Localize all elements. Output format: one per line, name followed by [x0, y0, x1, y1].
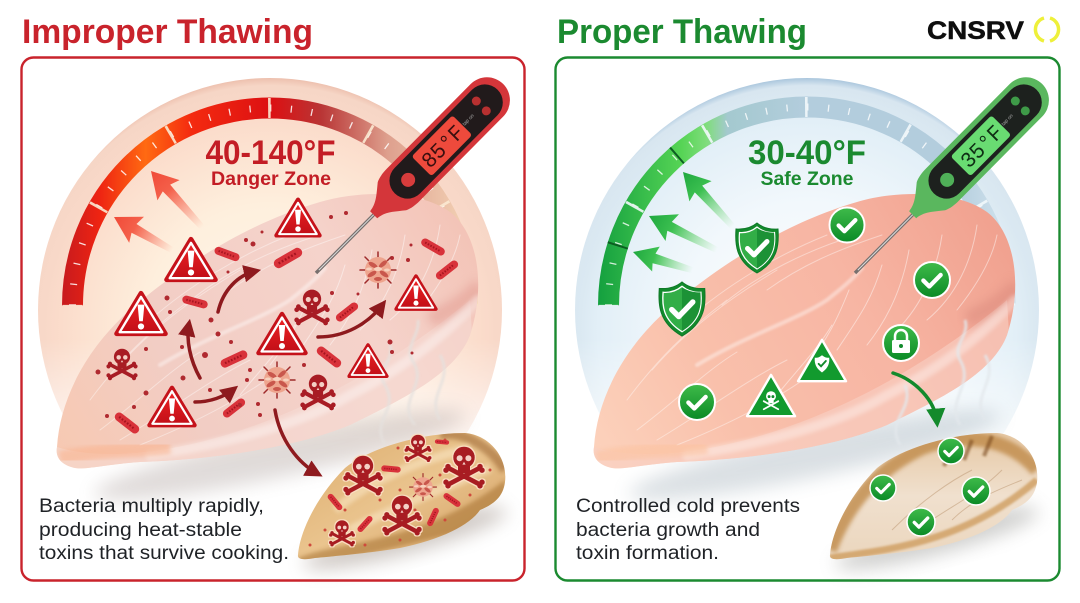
caption: bacteria [39, 496, 289, 564]
title: proper thawing: Proper Thawing [557, 13, 807, 51]
steam [896, 320, 989, 445]
gauge arc [608, 107, 1006, 306]
logo: CNSRV: CNSRV [927, 17, 1024, 45]
panel: proper thawing [556, 58, 1060, 581]
bacteria rods [113, 237, 460, 435]
steam [381, 320, 444, 445]
arrow to cooked chicken [893, 373, 937, 422]
lock badge [883, 325, 919, 361]
caption: cold prevents bacteria [576, 496, 800, 564]
spreading arrows [188, 271, 383, 474]
thermometer: 85F [300, 68, 519, 289]
shadow under raw chicken [625, 394, 1005, 516]
cluster on cooked chicken [410, 474, 436, 500]
thermometer: 35F: tap on [1001, 113, 1015, 127]
thermometer: 35F: 35°F [956, 121, 1009, 174]
subheading: safe zone: Safe Zone [760, 169, 854, 190]
raw chicken [50, 194, 480, 470]
bacteria clusters [259, 252, 396, 398]
skulls on cooked chicken [329, 435, 485, 546]
raw chicken [587, 194, 1017, 470]
thermometer: 35F [839, 68, 1058, 289]
safe arrow top [672, 162, 744, 237]
temperature dial [38, 78, 502, 440]
temperature dial [575, 78, 1039, 434]
skull icons on raw chicken [106, 290, 336, 410]
subheading: danger zone: Danger Zone [211, 169, 331, 190]
caption: bacteria: toxins that survive cooking. [39, 543, 289, 564]
danger arrow left [107, 204, 180, 263]
thermometer: 85F: tap on [462, 113, 476, 127]
gauge arc [72, 108, 468, 305]
caption: cold prevents bacteria: Controlled cold prevents [576, 496, 800, 517]
check badges [679, 208, 950, 420]
bacteria specks [96, 211, 414, 418]
caption: cold prevents bacteria: toxin formation. [576, 543, 719, 564]
shield icons [659, 223, 778, 336]
warning triangles [117, 200, 436, 425]
cooked chicken [830, 433, 1043, 581]
logo: CNSRV [927, 17, 1059, 45]
triangle with skull [747, 375, 795, 416]
danger arrow up [140, 161, 213, 237]
thermometer: 85F: 85°F [417, 121, 470, 174]
heading: 30-40F: 30-40°F [748, 134, 866, 172]
safe arrow lower [629, 240, 696, 283]
caption: bacteria: producing heat-stable [39, 520, 242, 541]
title: improper thawing: Improper Thawing [22, 13, 313, 51]
heading: 40-140F: 40-140°F [206, 134, 336, 172]
shadow under raw chicken [90, 394, 470, 516]
panel: improper thawing [22, 58, 524, 581]
check badges on cooked chicken [870, 438, 990, 536]
safe arrow middle [642, 203, 724, 263]
triangle with shield [798, 340, 846, 381]
red specks on cooked chicken [308, 438, 492, 546]
rods on cooked chicken [326, 439, 462, 533]
caption: cold prevents bacteria: bacteria growth and [576, 520, 760, 541]
caption: bacteria: Bacteria multiply rapidly, [39, 496, 264, 517]
cooked chicken [298, 433, 511, 581]
